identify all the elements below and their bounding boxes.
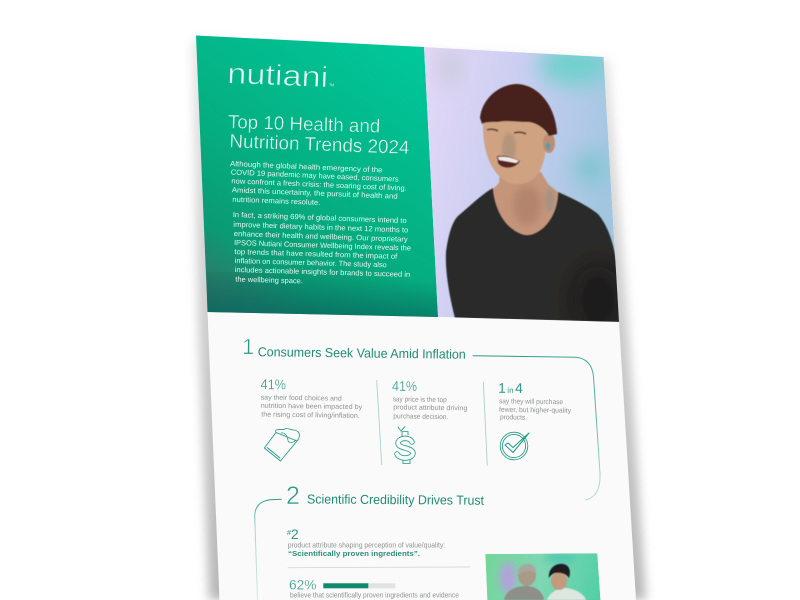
stat: #2 attribute: product attribute shaping perception of value/quality:	[288, 542, 445, 549]
stat: 1 in 4: say they will purchase	[499, 398, 563, 406]
stat: #2 attribute	[287, 526, 445, 558]
stat: 41% price: product attribute driving	[393, 404, 467, 412]
stat: 1 in 4: 1in4	[498, 380, 523, 396]
header photo: laughing woman	[424, 45, 622, 334]
section 2 number: 2	[286, 482, 300, 510]
stat: 41% food choices: 41%	[260, 376, 286, 392]
stat: 41% food choices	[260, 376, 363, 461]
logo: nutiani: TM	[329, 83, 334, 87]
intro paragraph 1: COVID 19 pandemic may have eased, consumers	[231, 168, 399, 184]
intro paragraph 2	[233, 210, 411, 285]
icon: check mark in circle	[500, 432, 529, 460]
intro paragraph 2: improve their dietary habits in the next 12 months to	[233, 220, 408, 235]
section 2 connector line	[255, 499, 282, 600]
stat: 1 in 4	[498, 380, 572, 460]
icon: phone with receipt	[264, 429, 299, 461]
stat: 1 in 4: fewer, but higher-quality	[499, 407, 572, 415]
stat: 41% food choices: nutrition have been impacted by	[261, 403, 363, 411]
stat: 1 in 4: products.	[500, 414, 527, 422]
shirt	[446, 188, 621, 322]
intro paragraph 2: inflation on consumer behavior. The study also	[235, 256, 387, 269]
eyes	[487, 129, 526, 134]
page shadow	[192, 40, 646, 600]
stat: #2 attribute: “Scientifically proven ingredients”.	[288, 549, 420, 558]
section 2 heading: Scientific Credibility Drives Trust	[307, 492, 484, 508]
page sheet	[196, 36, 636, 600]
photo: two people	[485, 553, 600, 600]
intro paragraph 2: the wellbeing space.	[235, 275, 303, 285]
divider	[377, 380, 382, 465]
stat: 62% with bar: 62%	[289, 576, 316, 592]
face	[483, 112, 546, 184]
stat: #2 attribute: #	[287, 530, 291, 537]
stat: 41% food choices: the rising cost of living/inflation.	[261, 412, 360, 420]
stat: 62% with bar: believe that scientifically proven ingredients and evidence	[290, 593, 459, 600]
intro paragraph 1: now confront a fresh crisis: the soaring cost of living.	[231, 176, 407, 193]
stat: 41% price	[392, 378, 467, 464]
stat: 41% food choices: say their food choices and	[261, 395, 342, 403]
title: Top 10 Health and	[228, 112, 381, 138]
intro paragraph 2: IPSOS Nutiani Consumer Wellbeing Index reveals the	[234, 238, 411, 253]
title: Nutrition Trends 2024	[229, 131, 410, 159]
logo: nutiani: nutiani	[227, 58, 329, 94]
intro paragraph 2: top trends that have resulted from the impact of	[234, 247, 398, 261]
stat: #2 attribute: 2	[291, 526, 299, 542]
intro paragraph 1: Amidst this uncertainty, the pursuit of health and	[232, 185, 398, 201]
stat: 41% price: say price is the top	[393, 396, 447, 404]
stat: 41% price: 41%	[392, 378, 417, 394]
section 1 number: 1	[242, 334, 254, 359]
title	[228, 112, 410, 159]
intro paragraph 2: In fact, a striking 69% of global consumers intend to	[233, 210, 407, 225]
stat: 41% price: purchase decision.	[393, 413, 448, 421]
section 1: consumers seek value	[242, 334, 600, 500]
woman figure	[446, 84, 622, 334]
section 2: scientific credibility	[255, 482, 600, 600]
section 1 heading: Consumers Seek Value Amid Inflation	[258, 344, 466, 362]
intro paragraph 2: includes actionable insights for brands to succeed in	[235, 265, 410, 279]
intro paragraph 1: nutrition remains resolute.	[232, 195, 320, 207]
intro paragraph 2: enhance their health and wellbeing. Our proprietary	[234, 229, 408, 244]
stat: 62% with bar	[289, 576, 459, 600]
intro paragraph 1	[230, 159, 407, 207]
divider	[288, 566, 470, 569]
icon: dollar sign	[397, 426, 413, 464]
header panel: green intro	[196, 36, 438, 317]
section 1 connector line	[473, 356, 600, 500]
divider	[483, 382, 487, 466]
hair	[480, 84, 557, 136]
mouth	[497, 156, 520, 168]
intro paragraph 1: Although the global health emergency of the	[230, 159, 383, 174]
neck	[490, 172, 559, 240]
